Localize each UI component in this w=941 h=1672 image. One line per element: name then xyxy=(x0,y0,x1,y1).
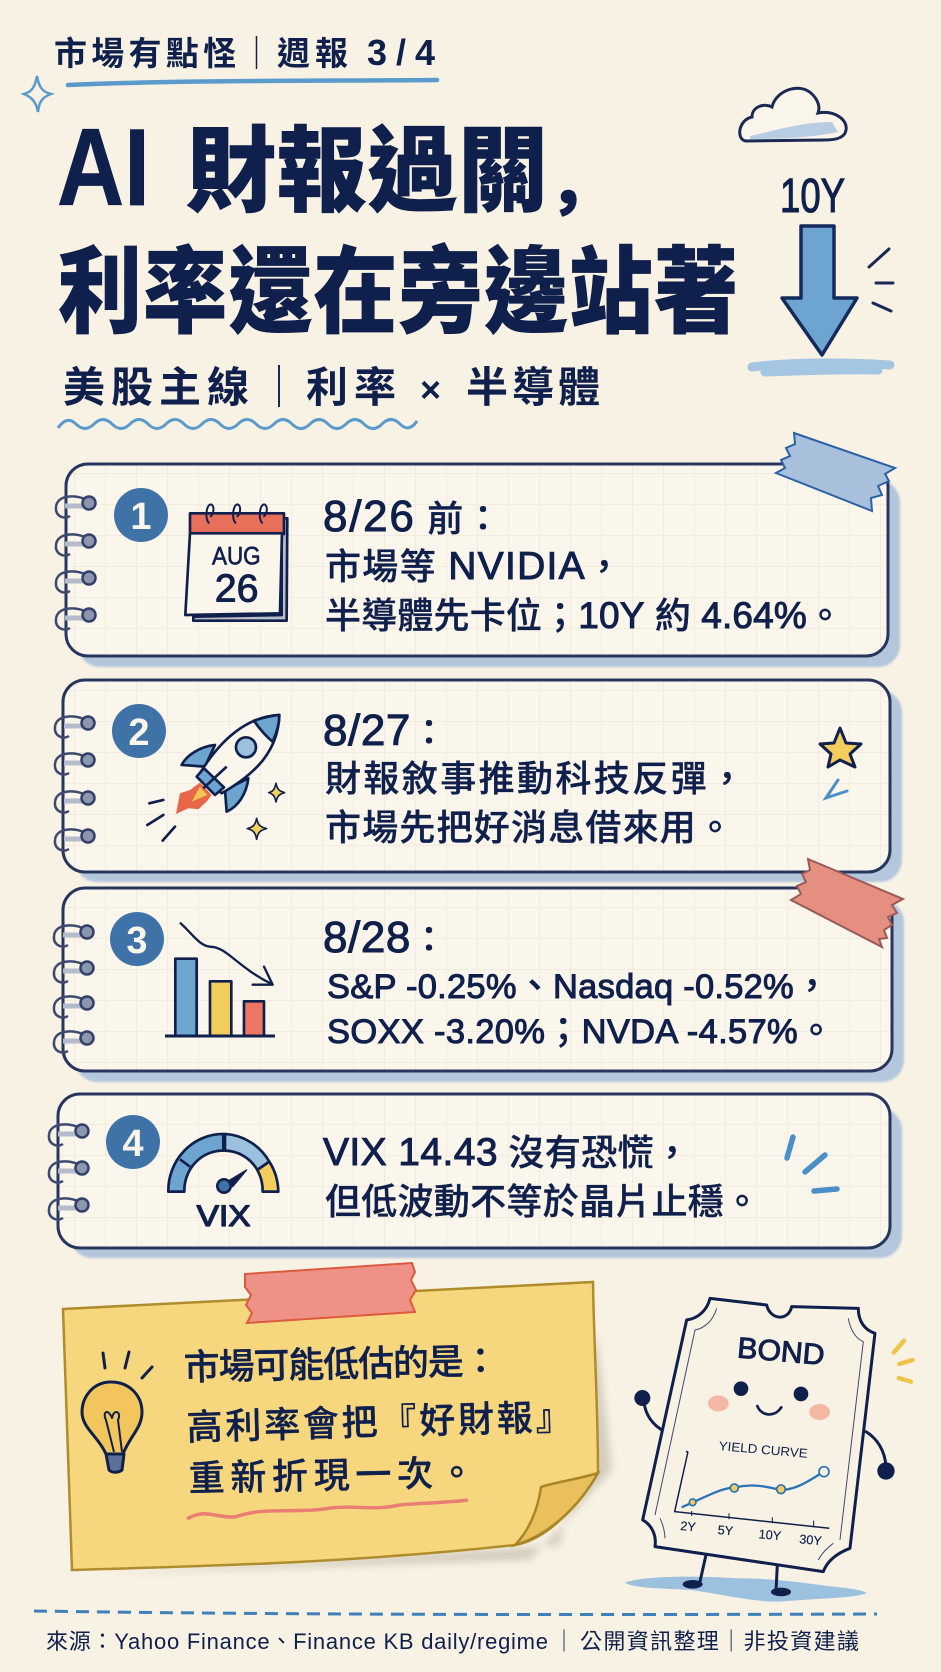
yield curve chart: 10Y xyxy=(758,1527,782,1543)
subtitle: 半導體 xyxy=(466,364,600,411)
footer source text xyxy=(46,1629,859,1654)
arms and legs xyxy=(644,1402,886,1592)
sticky note text: 重新折現一次。 xyxy=(188,1452,475,1499)
icon: VIX gauge: VIX xyxy=(197,1200,251,1233)
number badge 3 xyxy=(110,912,164,966)
card 1 text: 半導體先卡位；10Y 約 4.64%。 xyxy=(325,595,843,636)
card 3 text: SOXX -3.20%；NVDA -4.57%。 xyxy=(327,1010,834,1051)
ground scribble xyxy=(625,1577,867,1602)
spiral binding rings xyxy=(56,496,96,630)
icon: sparkle xyxy=(24,76,51,112)
icon: VIX gauge xyxy=(168,1134,278,1233)
icon: cloud xyxy=(740,88,846,141)
label: 10Y: 10Y xyxy=(780,170,845,223)
kicker: 市場有點怪 週報 3/4: ｜ xyxy=(240,35,273,72)
yield curve chart: 5Y xyxy=(717,1523,734,1538)
card 2 text: 財報敘事推動科技反彈， xyxy=(325,758,745,799)
card 4 text: 但低波動不等於晶片止穩。 xyxy=(325,1181,760,1222)
illustration: bond mascot xyxy=(625,1298,913,1602)
card 2 text: 市場先把好消息借來用。 xyxy=(325,807,733,848)
card 3 text xyxy=(323,913,834,1051)
number badge 1: 1 xyxy=(130,496,152,538)
card 1 text: 市場等 NVIDIA， xyxy=(325,545,622,588)
footer source text: ｜ xyxy=(553,1629,575,1654)
subtitle: 利率 xyxy=(306,364,396,411)
kicker underline xyxy=(68,80,437,85)
sticky note text xyxy=(183,1340,572,1499)
subtitle: 美股主線 xyxy=(63,364,249,411)
red washi tape xyxy=(791,859,903,947)
icon: star xyxy=(820,728,861,767)
wavy underline xyxy=(58,420,417,428)
card 1 text xyxy=(323,492,843,636)
kicker: 市場有點怪 週報 3/4: 市場有點怪 xyxy=(54,35,236,72)
red scribble underline xyxy=(187,1500,468,1519)
kicker: 市場有點怪 週報 3/4: 週報 xyxy=(277,35,348,72)
title xyxy=(57,107,738,345)
face xyxy=(708,1381,830,1420)
icon: falling bar chart xyxy=(165,923,275,1036)
panel: sticky note callout xyxy=(63,1263,612,1574)
sticky note text: 高利率會把『好財報』 xyxy=(186,1396,572,1448)
number badge 2 xyxy=(112,704,166,758)
icon: calendar AUG 26: AUG xyxy=(212,543,261,571)
number badge 1 xyxy=(114,488,168,542)
number badge 3: 3 xyxy=(126,920,148,962)
yellow accent ticks xyxy=(894,1341,913,1382)
kicker: 市場有點怪 週報 3/4 xyxy=(54,32,435,73)
footer source text: 來源：Yahoo Finance、Finance KB daily/regime xyxy=(46,1629,548,1654)
arrow motion ticks xyxy=(869,249,893,311)
title: ， xyxy=(535,166,601,240)
number badge 4: 4 xyxy=(122,1123,144,1165)
hands and feet xyxy=(634,1390,895,1596)
card 2 text xyxy=(323,706,745,848)
footer dashed line xyxy=(34,1611,877,1615)
yield curve chart xyxy=(675,1452,829,1548)
yield curve chart: 2Y xyxy=(680,1519,697,1534)
panel: card 2 xyxy=(55,680,902,882)
title: AI xyxy=(57,107,150,229)
icon: down arrow xyxy=(782,226,857,355)
footer source text: 公開資訊整理｜非投資建議 xyxy=(580,1629,859,1654)
icon: rocket xyxy=(147,715,285,841)
card 4 text: VIX 14.43 沒有恐慌， xyxy=(323,1131,690,1174)
card 2 text: 8/27： xyxy=(323,706,447,755)
subtitle xyxy=(63,364,600,411)
panel: card 3 xyxy=(54,888,904,1082)
spiral binding rings xyxy=(54,925,94,1053)
icon: calendar AUG 26 xyxy=(185,504,287,621)
ticket body xyxy=(643,1298,875,1572)
yield curve chart: 30Y xyxy=(799,1532,823,1548)
card 1 text: 8/26 前： xyxy=(323,492,501,541)
card 3 text: 8/28： xyxy=(323,913,447,962)
icon: light bulb xyxy=(82,1352,152,1472)
subtitle: × xyxy=(420,369,441,410)
ticket inner lines xyxy=(655,1308,863,1560)
spiral binding rings xyxy=(55,716,94,851)
card 3 text: S&P -0.25%、Nasdaq -0.52%， xyxy=(327,965,830,1006)
title: 利率還在旁邊站著 xyxy=(58,240,738,345)
subtitle: ｜ xyxy=(258,364,300,411)
number badge 4 xyxy=(106,1115,160,1169)
kicker: 市場有點怪 週報 3/4: 3/4 xyxy=(367,32,435,73)
panel: card 4 xyxy=(49,1094,902,1258)
icon: calendar AUG 26: 26 xyxy=(215,566,259,610)
yield curve label: YIELD CURVE xyxy=(718,1439,808,1461)
page fold xyxy=(515,1473,598,1545)
card 4 text xyxy=(323,1131,760,1222)
spiral binding rings xyxy=(49,1124,88,1220)
blue accent dashes xyxy=(787,1137,837,1191)
red washi tape xyxy=(245,1263,416,1323)
panel: card 1 xyxy=(56,464,900,667)
bond label: BOND xyxy=(736,1331,826,1372)
number badge 2: 2 xyxy=(128,712,150,754)
title: 財報過關 xyxy=(186,120,548,224)
blue washi tape xyxy=(776,433,895,511)
arrow scribble xyxy=(752,363,890,372)
blue check mark xyxy=(826,780,847,798)
sticky note text: 市場可能低估的是： xyxy=(183,1340,499,1388)
